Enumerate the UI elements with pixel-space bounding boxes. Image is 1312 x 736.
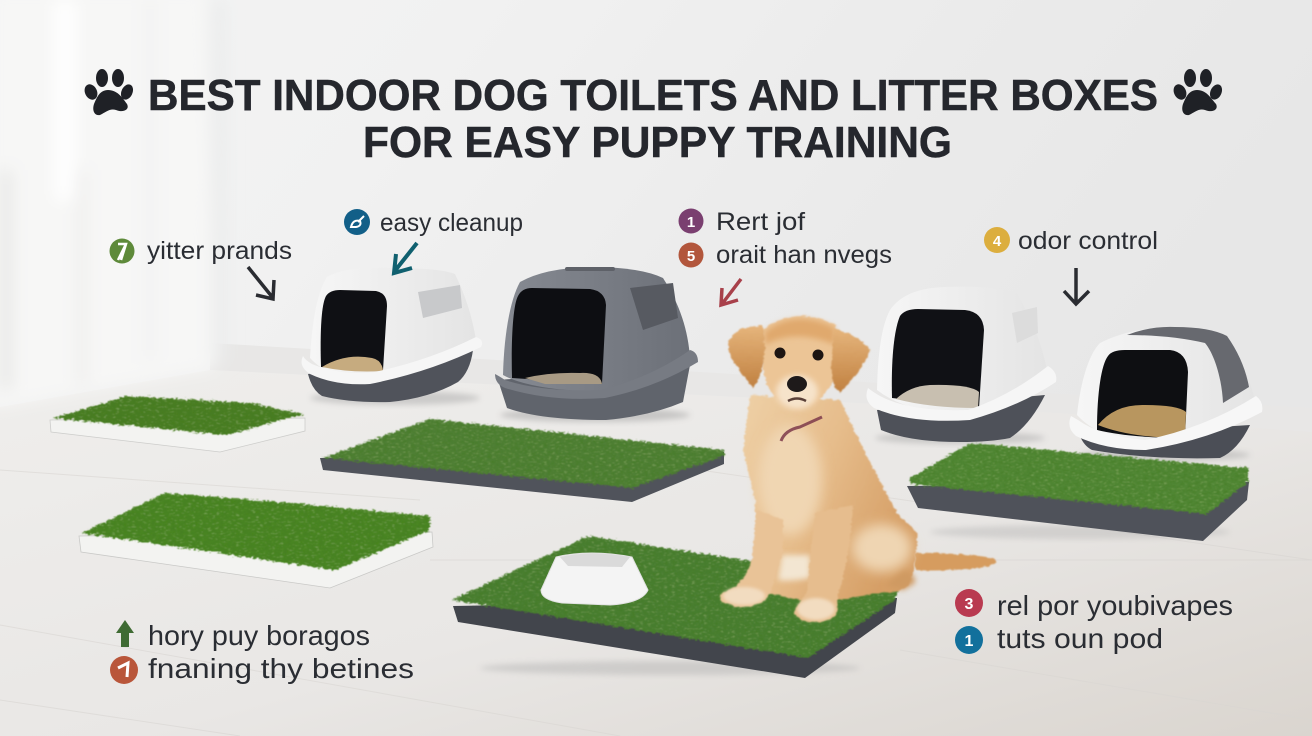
litter box 3 (866, 287, 1056, 444)
icon: green badge (110, 238, 134, 264)
label: rel por youbivapes / tuts oun pod (955, 589, 1233, 654)
title (82, 69, 1224, 167)
icon: paw left (82, 69, 135, 115)
label text: hory puy boragos (148, 620, 370, 651)
label text: easy cleanup (380, 209, 523, 237)
heading line 1: BEST INDOOR DOG TOILETS AND LITTER BOXES (148, 71, 1158, 120)
label text: orait han nvegs (716, 241, 892, 269)
puppy tail (915, 553, 996, 570)
puppy muzzle (776, 375, 818, 409)
label text: Rert jof (716, 208, 805, 236)
label: easy cleanup (344, 209, 523, 273)
icon: white bowl (541, 553, 648, 605)
background: floor planks (0, 470, 1312, 736)
label: odor control (984, 227, 1158, 304)
icon: blue badge 1: 1 (965, 633, 974, 650)
puppy body (743, 395, 917, 600)
grass pad 2 (320, 419, 724, 502)
icon: blue badge 1 (955, 626, 983, 654)
label: hory puy boragos / fnaning thy betines (110, 620, 414, 684)
background: curtain (0, 0, 226, 408)
background: floor (0, 370, 1312, 736)
puppy left paw (723, 587, 765, 605)
puppy chest (758, 425, 822, 535)
icon: purple badge 1: 1 (687, 214, 695, 231)
puppy right ear (832, 328, 871, 393)
label text: yitter prands (147, 237, 292, 265)
puppy head (763, 316, 838, 410)
label text: tuts oun pod (997, 623, 1163, 654)
litter box 2 (495, 267, 698, 422)
puppy (720, 316, 996, 622)
icon: crimson badge 3: 3 (965, 596, 974, 613)
arrow (394, 243, 417, 273)
grass pad 4 (right) (907, 443, 1249, 541)
icon: paw right (1171, 69, 1224, 115)
grass pad 3 (left foreground) (79, 493, 433, 588)
puppy nose (787, 376, 807, 392)
icon: green up arrow (116, 620, 134, 647)
icon: purple badge 1 (678, 208, 704, 234)
puppy eyes (774, 348, 824, 360)
heading line 2: FOR EASY PUPPY TRAINING (363, 118, 952, 167)
arrow (1064, 268, 1089, 304)
label: Rert jof / orait han nvegs (678, 208, 892, 305)
icon: rust badge (110, 656, 138, 684)
icon: crimson badge 3 (955, 589, 983, 617)
arrow (248, 267, 274, 299)
puppy collar (781, 417, 822, 441)
background: skirting board (210, 343, 1312, 432)
label: yitter prands (110, 237, 292, 299)
grass pad 1 (50, 396, 305, 452)
litter box 4 (1069, 327, 1262, 461)
icon: yellow badge 4 (984, 227, 1010, 253)
icon: rust badge 5: 5 (687, 248, 695, 265)
puppy hip shade (885, 570, 915, 590)
label text: odor control (1018, 227, 1158, 255)
grass pad with bowl (centre) (452, 536, 900, 678)
label text: rel por youbivapes (997, 590, 1233, 621)
puppy belly (778, 555, 810, 581)
label text: fnaning thy betines (148, 653, 414, 684)
icon: yellow badge 4: 4 (993, 233, 1002, 250)
puppy haunch (852, 524, 912, 572)
icon: blue badge (344, 209, 370, 235)
background: room wall (0, 0, 1312, 440)
icon: rust badge 5 (678, 242, 704, 268)
puppy right paw (797, 598, 835, 620)
litter box 1 (302, 268, 482, 405)
puppy forehead (765, 319, 835, 345)
puppy front leg right (794, 505, 853, 622)
puppy mouth (788, 398, 806, 401)
puppy front leg left (720, 510, 783, 607)
puppy left ear (728, 325, 765, 388)
arrow (721, 279, 741, 305)
